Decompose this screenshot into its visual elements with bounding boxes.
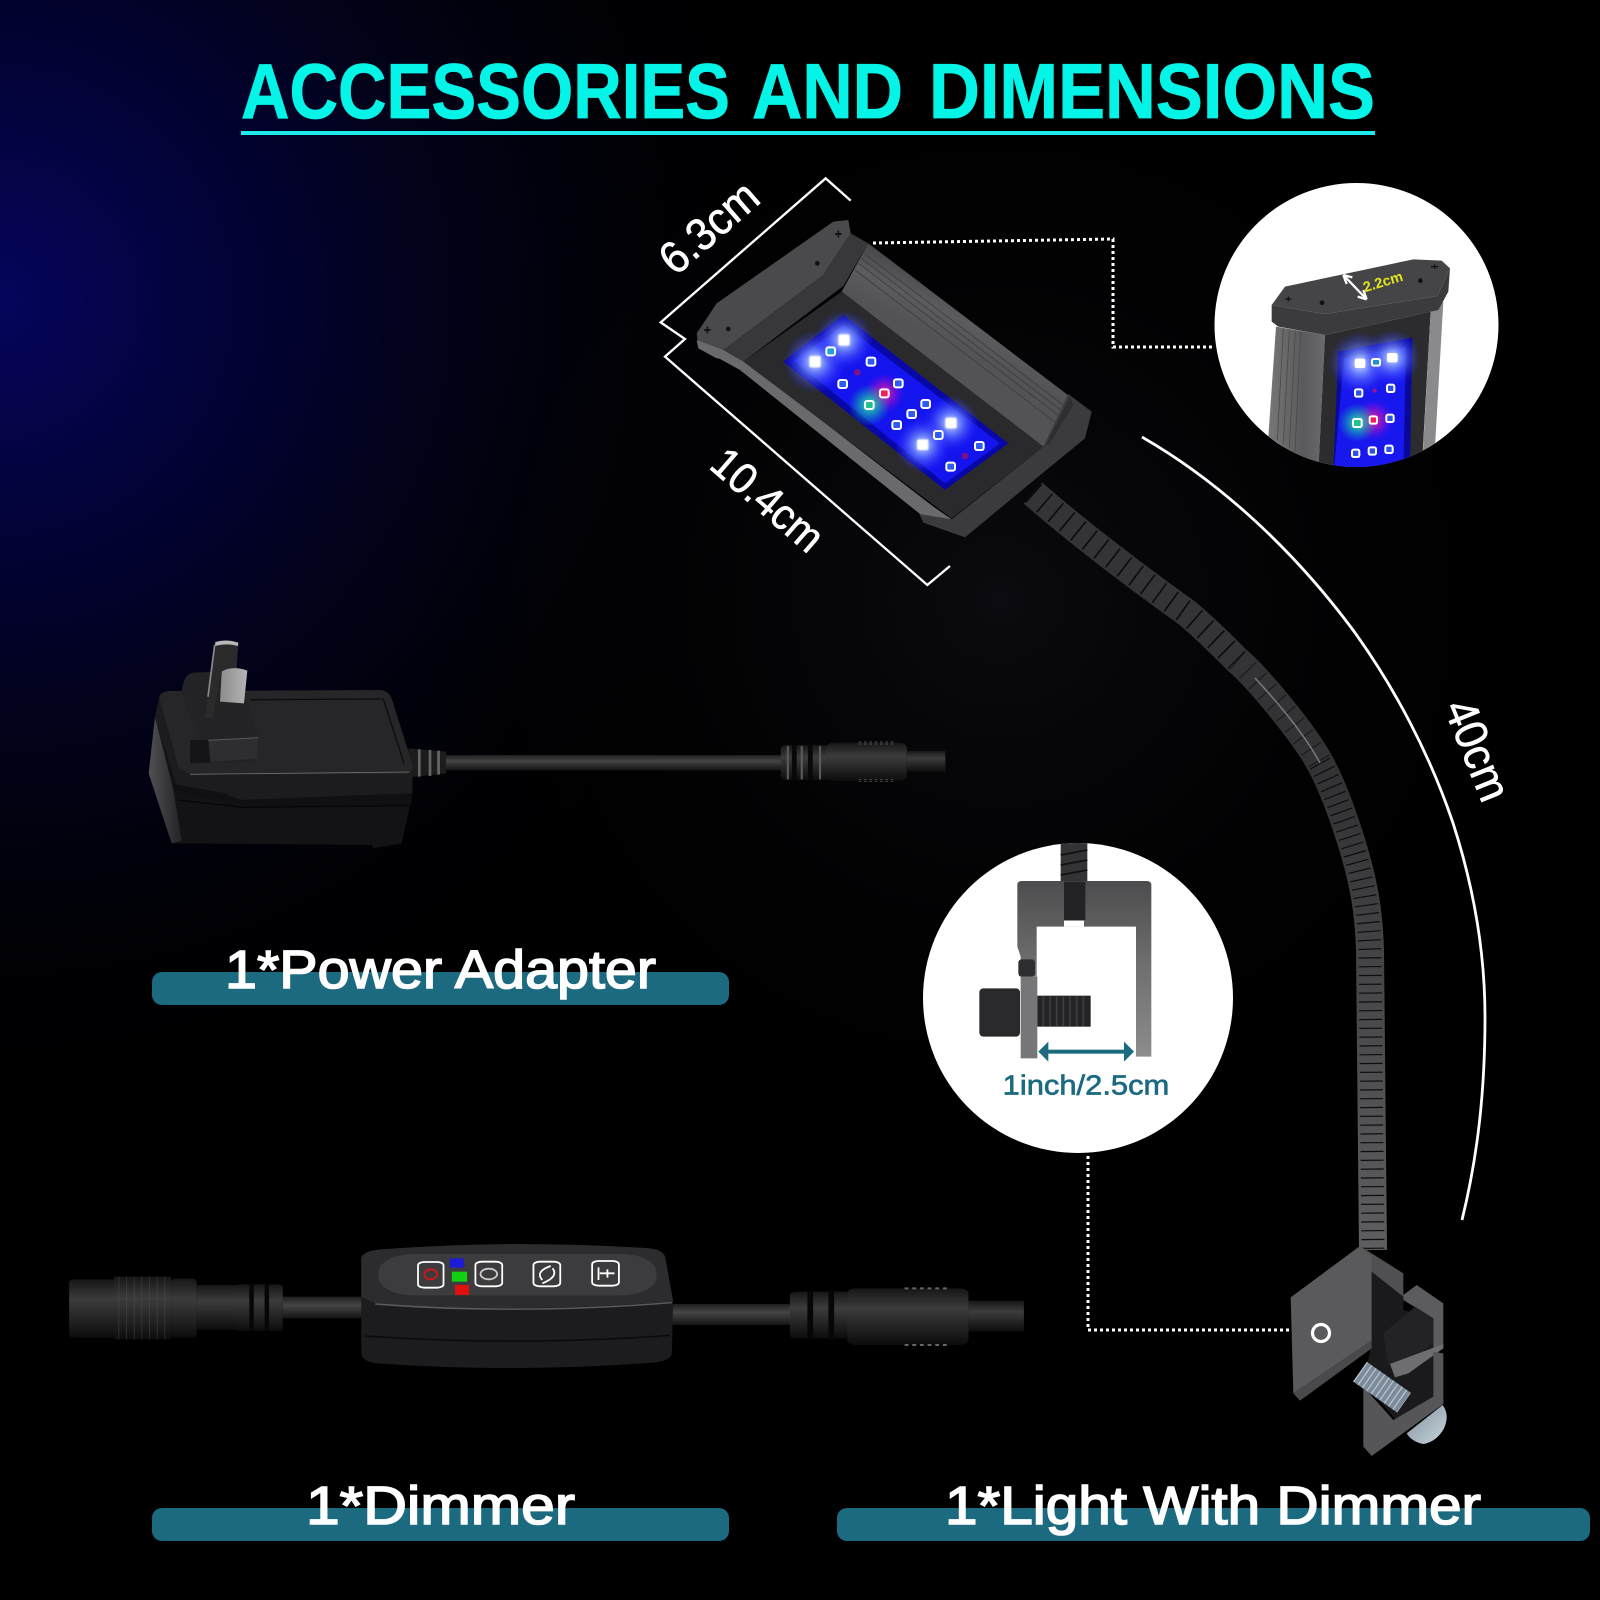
arrow 1 inch bbox=[1038, 1042, 1134, 1062]
left socket connector bbox=[69, 1277, 283, 1339]
dimension label 40cm: 40cm bbox=[1434, 692, 1522, 808]
label: dimmer bbox=[152, 1476, 729, 1541]
dimmer bbox=[69, 1244, 1024, 1368]
lamp body bbox=[697, 220, 1092, 537]
gooseneck cable bbox=[1033, 493, 1373, 1250]
label: power adapter bbox=[152, 940, 729, 1005]
dimmer cables bbox=[283, 1297, 366, 1318]
label 2.2cm: 2.2cm bbox=[1361, 269, 1405, 296]
label: light with dimmer bbox=[837, 1476, 1590, 1541]
dimension label 10.4cm: 10.4cm bbox=[701, 439, 833, 562]
LED panel side view bbox=[1328, 329, 1421, 470]
label: dimmer: 1*Dimmer bbox=[306, 1476, 575, 1536]
dimension label 6.3cm: 6.3cm bbox=[649, 170, 769, 284]
adapter body bbox=[149, 690, 413, 848]
dimmer control panel bbox=[378, 1254, 657, 1295]
dotted leader to top detail circle bbox=[873, 239, 1215, 347]
clamp base bbox=[1291, 1246, 1447, 1456]
dotted leader to clamp detail circle bbox=[1088, 1156, 1311, 1330]
arc dimension line bbox=[1142, 437, 1485, 1220]
detail circle: clamp 1 inch bbox=[923, 840, 1233, 1153]
detail circle: lamp end 2.2cm bbox=[1214, 183, 1498, 470]
power adapter bbox=[149, 640, 945, 848]
arrow 2.2cm bbox=[1343, 275, 1367, 299]
label: power adapter: 1*Power Adapter bbox=[225, 940, 656, 1000]
dimmer body bbox=[361, 1244, 673, 1368]
dimension brackets bbox=[661, 178, 950, 585]
title: AND bbox=[752, 47, 903, 135]
clamp marker ring bbox=[1312, 1324, 1330, 1342]
label: light with dimmer: 1*Light With Dimmer bbox=[945, 1476, 1481, 1536]
adapter cable bbox=[443, 755, 786, 770]
label 1inch/2.5cm: 1inch/2.5cm bbox=[1003, 1070, 1169, 1101]
adapter plug bbox=[182, 640, 258, 763]
adapter strain relief bbox=[409, 748, 446, 777]
title: ACCESSORIES bbox=[241, 47, 730, 135]
LED panel bbox=[783, 310, 1008, 490]
title: DIMENSIONS bbox=[929, 47, 1375, 135]
title bbox=[241, 47, 1375, 135]
right plug connector bbox=[790, 1288, 1024, 1345]
clamp screw thread bbox=[1360, 1372, 1404, 1403]
adapter barrel connector bbox=[781, 742, 945, 781]
lamp head with dimension lines bbox=[649, 170, 1092, 585]
